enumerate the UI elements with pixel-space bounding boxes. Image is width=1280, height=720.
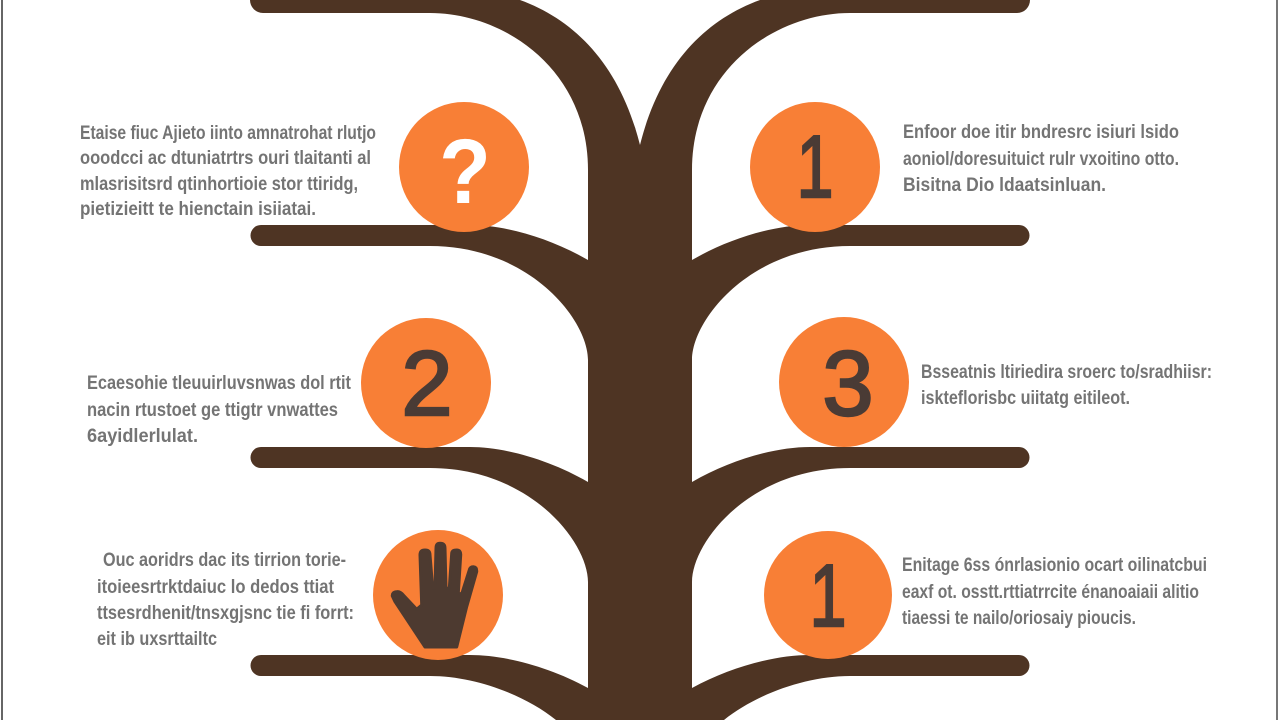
text block: bottom left: Ouc aoridrs dac its tirrion torie-: [103, 550, 346, 571]
text block: top left: mlasrisitsrd qtinhortioie stor ttiridg,: [80, 174, 358, 195]
panel: top left: [80, 102, 529, 232]
icon: number 1 badge: [750, 102, 880, 232]
text block: middle right: iskteflorisbc uiitatg eitileot.: [921, 388, 1130, 409]
text block: middle left: Ecaesohie tleuuirluvsnwas dol rtit: [87, 373, 352, 394]
text block: bottom right: [902, 555, 1207, 629]
text block: top right: aoniol/doresuituict rulr vxoitino otto.: [903, 149, 1179, 170]
icon: number 1 badge, lower: [764, 531, 892, 659]
text block: top right: Enfoor doe itir bndresrc isiuri lsido: [903, 122, 1179, 143]
icon: number 2 badge: 2: [401, 333, 453, 435]
text block: middle right: Bsseatnis ltiriedira sroerc to/sradhiisr:: [921, 362, 1212, 383]
icon: number 3 badge: 3: [822, 333, 874, 435]
icon: number 2 badge: [361, 318, 491, 448]
icon: question mark badge: [399, 102, 529, 232]
text block: bottom right: tiaessi te nailo/oriosaiy pioucis.: [902, 608, 1136, 629]
panel: top right: [750, 102, 1179, 232]
panel: middle left: [87, 318, 491, 448]
text block: bottom left: ttsesrdhenit/tnsxgjsnc tie fi forrt:: [97, 603, 354, 624]
text block: top left: pietizieitt te hienctain isiiatai.: [80, 199, 316, 220]
text block: middle left: nacin rtustoet ge ttigtr vnwattes: [87, 400, 338, 421]
text block: bottom left: [97, 550, 354, 650]
text block: middle right: [921, 362, 1212, 409]
text block: top right: Bisitna Dio ldaatsinluan.: [903, 175, 1106, 196]
text block: bottom left: itoieesrtrktdaiuc lo dedos ttiat: [97, 577, 335, 598]
panel: bottom right: [764, 531, 1207, 659]
text block: middle left: [87, 373, 352, 447]
icon: number 1 badge, lower: 1: [810, 546, 846, 645]
text block: bottom right: Enitage 6ss ónrlasionio ocart oilinatcbui: [902, 555, 1207, 576]
panel: bottom left: [97, 530, 503, 660]
icon: number 1 badge: 1: [797, 117, 833, 216]
text block: bottom right: eaxf ot. osstt.rttiatrrcite énanoaiaii alitio: [902, 582, 1199, 603]
text block: top left: [80, 123, 376, 220]
tree: trunk and branches: [250, 0, 1030, 720]
panel: middle right: [779, 317, 1212, 447]
icon: number 3 badge: [779, 317, 909, 447]
text block: top left: ooodcci ac dtuniatrtrs ouri tlaitanti al: [80, 148, 371, 169]
text block: middle left: 6ayidlerlulat.: [87, 426, 198, 447]
icon: question mark badge: ?: [439, 120, 491, 223]
text block: top right: [903, 122, 1179, 196]
text block: bottom left: eit ib uxsrttailtc: [97, 629, 217, 650]
text block: top left: Etaise fiuc Ajieto iinto amnatrohat rlutjo: [80, 123, 376, 144]
icon: hand badge: [373, 530, 503, 660]
